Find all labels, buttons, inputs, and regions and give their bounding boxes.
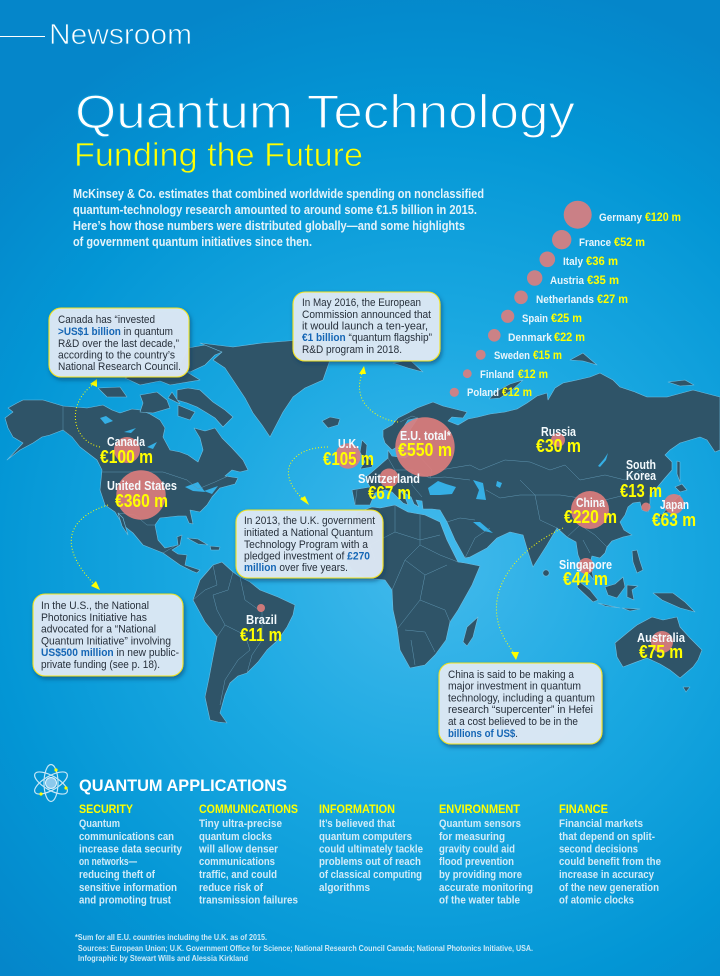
Poland funding: €12 m — [502, 385, 532, 399]
Austria funding: Austria — [550, 275, 585, 287]
callout: United States: US$500 million in new public- — [41, 647, 179, 659]
map: Arctic archipelago — [125, 372, 200, 420]
column: Communications — [198, 802, 298, 906]
callout: Canada: >US$1 billion in quantum — [58, 326, 173, 338]
callout: European Commission: it would launch a ten-year, — [302, 320, 428, 332]
column: Information: could ultimately tackle — [319, 844, 423, 856]
Germany funding: Germany — [599, 212, 643, 224]
Canada funding: Canada — [107, 435, 146, 449]
callout: China: technology, including a quantum — [448, 692, 595, 704]
E.U. total funding: E.U. total* — [400, 429, 451, 443]
United States funding: €360 m — [115, 490, 168, 511]
Poland funding — [450, 385, 532, 399]
callout: China: research “supercenter” in Hefei — [448, 704, 593, 716]
column: Security: SECURITY — [79, 802, 133, 816]
callout: European Commission: Commission announced that — [302, 309, 431, 321]
Singapore funding: €44 m — [563, 568, 608, 589]
footnote and sources: *Sum for all E.U. countries including the U.K. as of 2015. — [75, 932, 267, 942]
intro text: Here’s how those numbers were distributed globally—and some highlights — [73, 218, 465, 233]
section tag: Newsroom: Newsroom — [49, 19, 192, 51]
column: Information — [319, 802, 423, 894]
E.U. total funding — [395, 417, 455, 477]
Brazil funding: Brazil — [246, 613, 277, 627]
callout: China: at a cost believed to be in the — [448, 716, 578, 728]
Finland funding: Finland — [480, 369, 514, 381]
China funding — [564, 491, 617, 529]
Spain funding: Spain — [522, 313, 548, 325]
column: Communications: will allow denser — [198, 844, 279, 856]
Denmark funding: Denmark — [508, 332, 553, 344]
callout: U.K.: In 2013, the U.K. government — [244, 515, 375, 527]
callout: United States: In the U.S., the National — [41, 600, 149, 612]
callout: China: China is said to be making a — [448, 669, 575, 681]
Denmark funding: €22 m — [554, 330, 585, 344]
column: Communications: Tiny ultra-precise — [199, 818, 282, 830]
South Korea funding: €13 m — [620, 480, 662, 501]
world map — [5, 340, 720, 723]
column: Security: communications can — [79, 831, 174, 843]
map: Black Sea — [428, 481, 456, 495]
Italy funding: Italy — [563, 256, 584, 268]
callout: United States: Quantum Initiative” involving — [41, 636, 171, 648]
map: Greenland — [200, 340, 330, 437]
dotted arrow: Canada callout — [75, 379, 100, 447]
column: Security — [79, 802, 183, 906]
callout: U.K.: initiated a National Quantum — [244, 527, 373, 539]
South Korea funding: Korea — [626, 469, 657, 483]
column: Information: quantum computers — [319, 831, 412, 843]
callout: United States: advocated for a “National — [41, 624, 156, 636]
column: Communications: quantum clocks — [199, 831, 272, 843]
Japan funding — [652, 494, 696, 530]
column: Finance: of atomic clocks — [559, 894, 634, 906]
column: Security: on networks— — [79, 856, 137, 868]
Australia funding: €75 m — [639, 641, 683, 662]
E.U. total funding: €550 m — [398, 439, 452, 460]
Sweden funding: €15 m — [533, 348, 562, 362]
footnote and sources: Infographic by Stewart Wills and Alessia Kirkland — [78, 953, 248, 963]
heading: Quantum Applications: QUANTUM APPLICATIONS — [79, 776, 287, 795]
Brazil funding: €11 m — [240, 624, 282, 645]
column: Information: INFORMATION — [319, 802, 395, 816]
Switzerland funding: €67 m — [368, 482, 411, 503]
column: Environment: Quantum sensors — [439, 818, 521, 830]
map: Tasmania — [683, 687, 690, 692]
column: Finance: that depend on split- — [559, 831, 655, 843]
column: Finance: of the new generation — [559, 882, 659, 894]
column: Environment: of the water table — [439, 894, 520, 906]
Netherlands funding: €27 m — [597, 292, 628, 306]
Switzerland funding — [358, 468, 420, 503]
Netherlands funding — [514, 290, 628, 306]
France funding: France — [579, 237, 611, 249]
map: Great Britain — [360, 440, 373, 469]
Spain funding: €25 m — [551, 311, 582, 325]
callout: European Commission: €1 billion “quantum flagship” — [302, 332, 432, 344]
China funding: €220 m — [564, 506, 617, 527]
Poland funding: Poland — [467, 387, 499, 399]
Germany funding — [564, 201, 681, 229]
Australia funding — [637, 631, 686, 662]
map: Sri Lanka — [543, 570, 549, 576]
callout: European Commission: In May 2016, the European — [302, 297, 421, 309]
column: Information: algorithms — [319, 882, 370, 894]
Germany funding: €120 m — [645, 210, 681, 224]
Singapore funding: Singapore — [559, 558, 612, 572]
map: country borders — [63, 406, 650, 705]
footnote and sources — [75, 932, 533, 963]
Finland funding: €12 m — [518, 367, 548, 381]
map: Africa — [343, 505, 480, 668]
map: North America — [5, 400, 248, 573]
column: Information: It’s believed that — [319, 818, 395, 830]
column: Finance: FINANCE — [559, 802, 608, 816]
Russia funding — [536, 425, 581, 456]
column: Environment: for measuring — [439, 831, 505, 843]
intro text — [73, 186, 484, 249]
column: Information: problems out of reach — [319, 856, 421, 868]
dotted arrow: E.U. callout — [359, 366, 398, 422]
map: Ireland — [350, 452, 358, 465]
map: Cuba and Hispaniola — [187, 538, 220, 550]
callout: Canada: Canada has “invested — [58, 314, 155, 326]
column: Security: sensitive information — [79, 882, 177, 894]
column: Environment: by providing more — [439, 869, 522, 881]
column: Communications: communications — [199, 856, 275, 868]
map: Baja California — [118, 513, 128, 535]
callout: U.K.: Technology Program with a — [244, 539, 369, 551]
Japan funding: Japan — [660, 498, 689, 512]
Russia funding: Russia — [541, 425, 577, 439]
column: Finance: second decisions — [559, 844, 638, 856]
callout: U.K.: pledged investment of £270 — [244, 550, 370, 562]
U.K. funding: U.K. — [338, 437, 359, 451]
footnote and sources: Sources: European Union; U.K. Government Office for Science; National Research Council Canada; National Photonics Initiative, USA. — [78, 943, 533, 953]
United States funding — [107, 470, 177, 520]
callout: Canada: according to the country’s — [58, 350, 175, 362]
column: Environment: flood prevention — [439, 856, 514, 868]
column: Security: and promoting trust — [79, 894, 171, 906]
dotted arrow: U.S. callout — [71, 505, 108, 590]
map: South America — [193, 562, 295, 723]
map: Victoria Island — [140, 392, 170, 413]
Italy funding: €36 m — [586, 254, 618, 268]
France funding — [552, 230, 645, 249]
Australia funding: Australia — [637, 631, 686, 645]
column: Communications: transmission failures — [199, 894, 298, 906]
callout: China: billions of US$. — [448, 728, 518, 740]
callout: United States: private funding (see p. 18). — [41, 659, 160, 671]
Finland funding — [463, 367, 548, 381]
intro text: quantum-technology research amounted to around some €1.5 billion in 2015. — [73, 202, 477, 217]
subtitle: Funding the Future — [74, 136, 363, 173]
icon: atom — [31, 764, 71, 802]
map: Persian Gulf — [473, 522, 493, 533]
column: Environment: ENVIRONMENT — [439, 802, 521, 816]
callout: U.K.: million over five years. — [244, 562, 348, 574]
callout: China — [439, 663, 602, 744]
China funding: China — [576, 496, 606, 510]
map: Madagascar — [463, 617, 478, 646]
Italy funding — [540, 251, 618, 268]
callout: European Commission — [293, 292, 440, 361]
U.K. funding: €105 m — [323, 448, 374, 469]
Singapore funding — [559, 558, 612, 589]
dotted arrow: China callout — [496, 528, 563, 660]
callout: Canada — [49, 308, 189, 377]
map: Iceland — [322, 417, 340, 428]
United States funding: United States — [107, 479, 177, 493]
Russia funding: €30 m — [536, 435, 581, 456]
map: Banks Island — [98, 387, 127, 397]
Sweden funding: Sweden — [494, 350, 530, 362]
U.K. funding — [323, 437, 374, 469]
callout: China: major investment in quantum — [448, 680, 581, 692]
column: Communications: traffic, and could — [199, 869, 277, 881]
Spain funding — [501, 310, 582, 325]
column: Environment: gravity could aid — [439, 844, 515, 856]
map: Arctic Russian islands — [393, 353, 694, 399]
Canada funding — [100, 435, 153, 467]
South Korea funding: South — [626, 458, 656, 472]
callout: United States — [33, 594, 183, 676]
callout: Canada: R&D over the last decade,” — [58, 338, 179, 350]
column: Security: Quantum — [79, 818, 120, 830]
column: Environment — [439, 802, 533, 906]
Switzerland funding: Switzerland — [358, 472, 420, 486]
title: Quantum Technology — [75, 85, 576, 138]
intro text: McKinsey & Co. estimates that combined worldwide spending on nonclassified — [73, 186, 484, 201]
callout: United States: Photonics Initiative has — [41, 612, 147, 624]
dotted arrow: U.K. callout — [288, 447, 328, 505]
column: Information: of classical computing — [319, 869, 422, 881]
map: lakes — [100, 416, 608, 607]
map: Japan and Sakhalin — [659, 461, 687, 520]
Japan funding: €63 m — [652, 509, 696, 530]
Denmark funding — [488, 329, 585, 344]
Brazil funding — [240, 604, 282, 645]
callout: Canada: National Research Council. — [58, 361, 181, 373]
map: Southeast Asia islands — [577, 550, 695, 612]
South Korea funding — [620, 458, 662, 512]
Sweden funding — [476, 348, 562, 362]
France funding: €52 m — [614, 235, 645, 249]
column: Communications: reduce risk of — [199, 882, 263, 894]
column: Finance: increase in accuracy — [559, 869, 655, 881]
Austria funding — [527, 270, 619, 287]
column: Finance: Financial markets — [559, 818, 643, 830]
column: Security: reducing theft of — [79, 869, 155, 881]
column: Finance: could benefit from the — [559, 856, 661, 868]
callout: European Commission: R&D program in 2018. — [302, 344, 402, 356]
column: Environment: accurate monitoring — [439, 882, 533, 894]
column: Communications: COMMUNICATIONS — [199, 802, 298, 816]
callout: U.K. — [236, 510, 383, 578]
map: Australia — [615, 617, 702, 678]
intro text: of government quantum initiatives since then. — [73, 234, 312, 249]
column: Security: increase data security — [79, 844, 183, 856]
map: Ellesmere Island — [178, 345, 232, 372]
column: Finance — [559, 802, 661, 906]
map: Baffin Island — [177, 388, 233, 427]
map: Eurasia — [352, 373, 720, 580]
Netherlands funding: Netherlands — [536, 294, 594, 306]
Canada funding: €100 m — [100, 446, 153, 467]
Austria funding: €35 m — [587, 273, 619, 287]
map: Caspian Sea — [473, 480, 486, 500]
